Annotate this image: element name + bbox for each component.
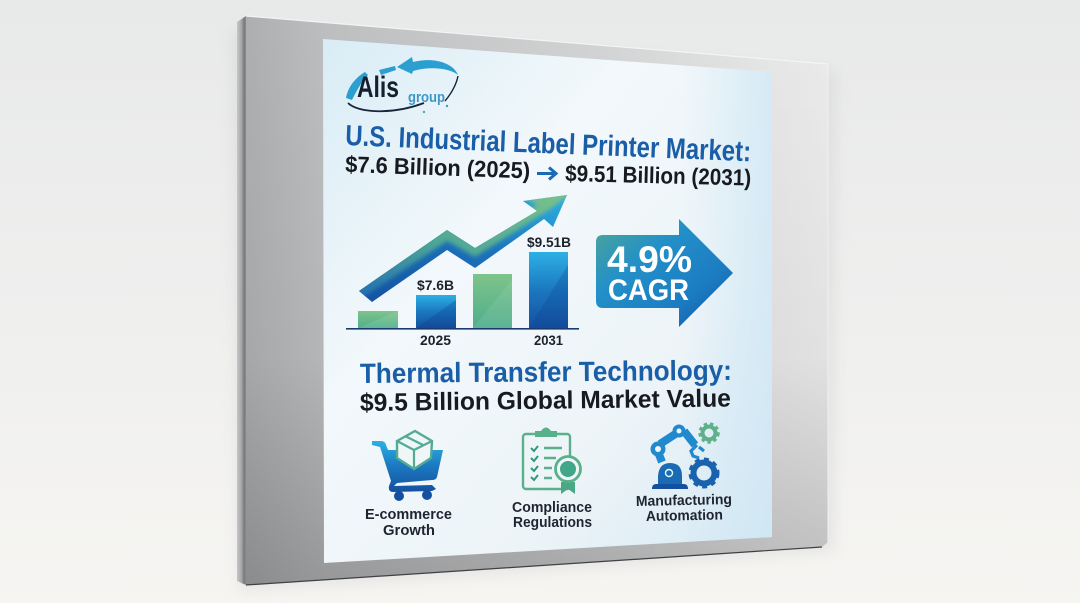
subtitle: [345, 151, 751, 191]
CAGR arrow: CAGR: [608, 274, 689, 307]
value label 2025: $7.6B: [417, 277, 454, 293]
axis: [346, 328, 579, 330]
label: e-commerce growth: Growth: [383, 523, 435, 539]
trend arrow: [359, 195, 567, 302]
subtitle: $7.6 Billion (2025): [345, 151, 531, 183]
label: manufacturing automation: Manufacturing: [636, 492, 732, 510]
bar: 2031: [529, 252, 568, 328]
logo: Alis group: Alis: [357, 71, 399, 104]
label: manufacturing automation: [636, 492, 732, 525]
label: manufacturing automation: Automation: [646, 507, 723, 525]
title: U.S. Industrial Label Printer Market:: [345, 120, 752, 168]
bar chart: [346, 234, 579, 348]
bar: 2025: [416, 295, 456, 328]
icon: robot arm with gears: [650, 424, 718, 489]
label: e-commerce growth: [365, 507, 452, 539]
label: compliance regulations: Compliance: [512, 500, 592, 516]
label: compliance regulations: [512, 500, 592, 531]
market value line: $9.5 Billion Global Market Value: [360, 384, 731, 417]
printed card: [323, 39, 772, 563]
value label 2031: $9.51B: [527, 234, 571, 250]
CAGR arrow: 4.9%: [607, 239, 692, 280]
metal plate: [237, 16, 828, 585]
bar: first: [358, 311, 398, 328]
subtitle: $9.51 Billion (2031): [565, 160, 751, 191]
CAGR arrow: [596, 219, 733, 327]
label: e-commerce growth: E-commerce: [365, 507, 452, 523]
logo: Alis group: group: [408, 89, 445, 106]
bar: third: [473, 274, 512, 328]
label: compliance regulations: Regulations: [513, 515, 592, 531]
year 2031: 2031: [534, 332, 563, 348]
icon: shopping cart with box: [372, 431, 443, 501]
icon: compliance clipboard: [523, 428, 580, 494]
year 2025: 2025: [420, 332, 451, 348]
logo: Alis group: [346, 57, 458, 113]
wall shadow: [232, 30, 836, 592]
thermal heading: Thermal Transfer Technology:: [360, 355, 732, 389]
